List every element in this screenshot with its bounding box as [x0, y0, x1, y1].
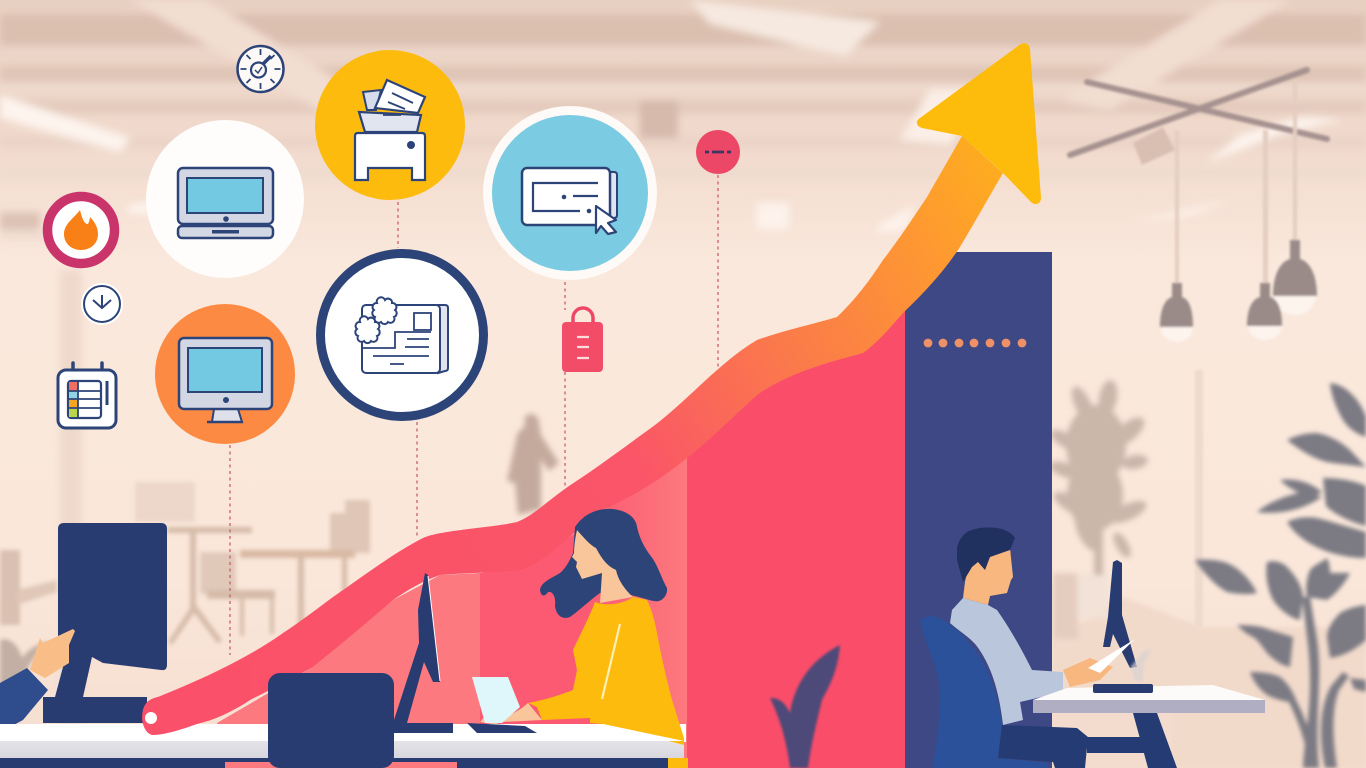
icon: red minus pin — [696, 130, 740, 174]
chart body: pink area under the arrow — [217, 300, 905, 768]
front desk — [0, 724, 688, 768]
blurred furniture on the left — [0, 482, 370, 703]
blurred foreground plant — [1195, 383, 1366, 768]
growth arrow — [142, 43, 1041, 735]
left monitor — [43, 523, 167, 723]
thin monitor on centre desk — [393, 573, 453, 733]
wall column at right — [1195, 370, 1203, 628]
hands — [502, 703, 542, 722]
woman at desk — [467, 509, 684, 745]
right desk with monitor — [1033, 560, 1265, 768]
leaf silhouette in pink column — [770, 645, 840, 768]
hair — [540, 509, 667, 618]
icon: download arrow — [81, 283, 123, 325]
background of right desk area below the tower — [1052, 713, 1172, 768]
icon: flame ring — [48, 196, 114, 264]
blurred standing person — [507, 414, 559, 515]
icon: calendar — [58, 363, 116, 428]
icon: laptop in white circle — [146, 120, 304, 278]
face and neck — [963, 548, 1013, 605]
keyboard — [467, 723, 537, 733]
desk top in front of torso — [470, 724, 684, 741]
orange dots on tower — [924, 339, 1026, 347]
navy tower column — [905, 252, 1052, 768]
tablet — [472, 677, 520, 723]
chair — [920, 615, 1048, 768]
icon: monitor in orange circle — [155, 304, 295, 444]
hand — [1063, 658, 1113, 687]
legs — [998, 725, 1088, 768]
phone in hand — [1088, 639, 1135, 673]
icon: printer in yellow circle — [315, 50, 465, 200]
blurred ceiling lamps — [1070, 70, 1327, 342]
face and neck — [572, 530, 633, 603]
front chair back — [268, 673, 394, 768]
pointing hand and sleeve — [0, 629, 75, 728]
blurred potted plant — [1048, 379, 1150, 639]
icon: red bag — [562, 308, 603, 372]
hair — [957, 527, 1015, 582]
dotted connector lines — [230, 175, 718, 655]
torso and arm — [528, 597, 684, 745]
icon: browser card in blue circle — [483, 106, 657, 280]
arrow tail dot — [145, 712, 157, 724]
icon: gauge — [238, 46, 284, 92]
man at right desk — [920, 527, 1113, 768]
icon: document with gears — [320, 254, 484, 416]
arrow tail over desk — [142, 660, 250, 735]
torso — [950, 598, 1063, 725]
floor at right — [1052, 597, 1366, 768]
